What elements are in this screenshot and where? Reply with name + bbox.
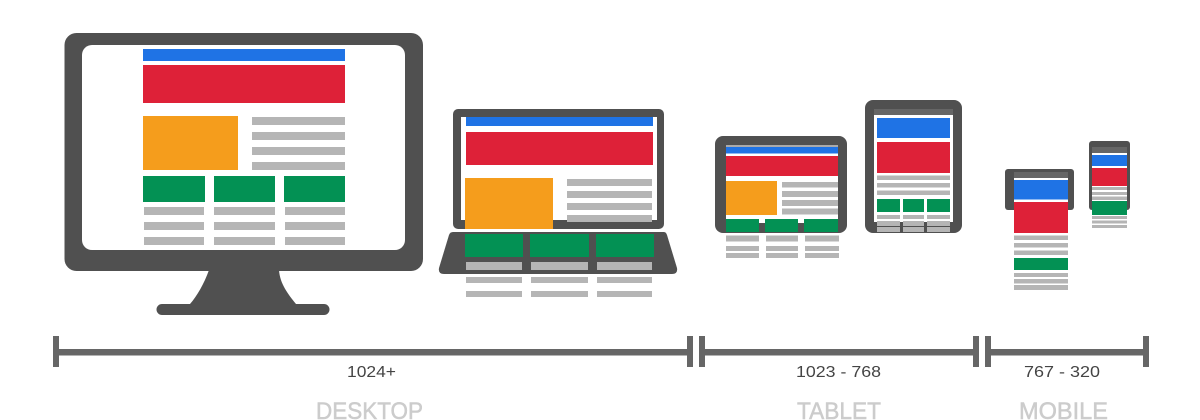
small phone layout: green block — [1092, 201, 1127, 215]
portrait layout: hero — [877, 142, 950, 173]
tablet layout: image — [726, 181, 777, 215]
icon: desktop monitor — [64, 33, 423, 315]
desktop layout: header bar — [143, 49, 345, 61]
small phone layout: lower text lines — [1092, 216, 1127, 228]
tablet landscape screen — [726, 145, 838, 223]
phone layout: lower text lines — [1014, 273, 1068, 290]
desktop layout: green columns — [143, 176, 345, 202]
laptop layout: image — [465, 178, 553, 229]
tablet layout: column text lines — [726, 236, 839, 258]
label: tablet width: 1023 - 768 — [796, 364, 881, 381]
tablet layout: green columns — [726, 219, 838, 232]
laptop base — [439, 232, 677, 274]
icon: tablet portrait — [865, 100, 962, 233]
tablet portrait body — [865, 100, 962, 233]
small phone layout: header bar — [1092, 155, 1127, 166]
monitor body — [64, 33, 423, 271]
laptop layout: green columns — [465, 234, 654, 257]
small phone layout: text lines — [1092, 187, 1127, 200]
laptop layout: hero — [466, 132, 653, 165]
phone landscape screen — [1014, 172, 1068, 210]
laptop screen — [461, 117, 657, 220]
tablet layout: header bar — [726, 147, 838, 154]
tablet layout: text lines — [782, 182, 838, 214]
desktop layout: text lines — [252, 117, 345, 170]
monitor stand — [156, 270, 330, 315]
phone layout: header bar — [1014, 180, 1068, 200]
portrait layout: column text lines — [877, 215, 950, 232]
label: mobile width: 767 - 320 — [1024, 364, 1100, 381]
tablet portrait top band — [874, 109, 953, 115]
laptop layout: text lines — [567, 179, 652, 222]
desktop layout: column text lines — [144, 207, 345, 245]
tablet portrait screen — [874, 109, 953, 222]
label: desktop width: 1024+ — [347, 364, 396, 381]
small phone layout: hero — [1092, 168, 1127, 186]
laptop lid — [453, 109, 664, 229]
icon: phone landscape — [1005, 169, 1074, 290]
laptop layout: header bar — [466, 117, 653, 126]
portrait layout: header bar — [877, 118, 950, 138]
desktop layout: image — [143, 116, 238, 170]
icon: tablet landscape — [715, 136, 847, 258]
phone layout: text lines — [1014, 236, 1068, 255]
phone layout: hero — [1014, 202, 1068, 233]
ruler: mobile range — [985, 336, 1149, 367]
icon: laptop — [439, 109, 677, 297]
monitor screen — [82, 45, 405, 250]
phone portrait top band — [1092, 147, 1127, 153]
phone portrait screen — [1092, 147, 1127, 210]
phone portrait body — [1089, 141, 1130, 210]
tablet layout: hero — [726, 156, 838, 176]
phone layout: green block — [1014, 258, 1068, 270]
phone landscape top band — [1014, 172, 1068, 178]
ruler: desktop range — [53, 336, 693, 367]
icon: phone portrait — [1089, 141, 1130, 228]
ruler: tablet range — [699, 336, 979, 367]
tablet landscape top band — [726, 145, 838, 147]
tablet landscape body — [715, 136, 847, 233]
desktop layout: hero — [143, 65, 345, 103]
phone landscape body — [1005, 169, 1074, 210]
laptop layout: column text lines — [466, 262, 652, 297]
portrait layout: green columns — [877, 199, 950, 212]
portrait layout: text lines — [877, 176, 950, 195]
